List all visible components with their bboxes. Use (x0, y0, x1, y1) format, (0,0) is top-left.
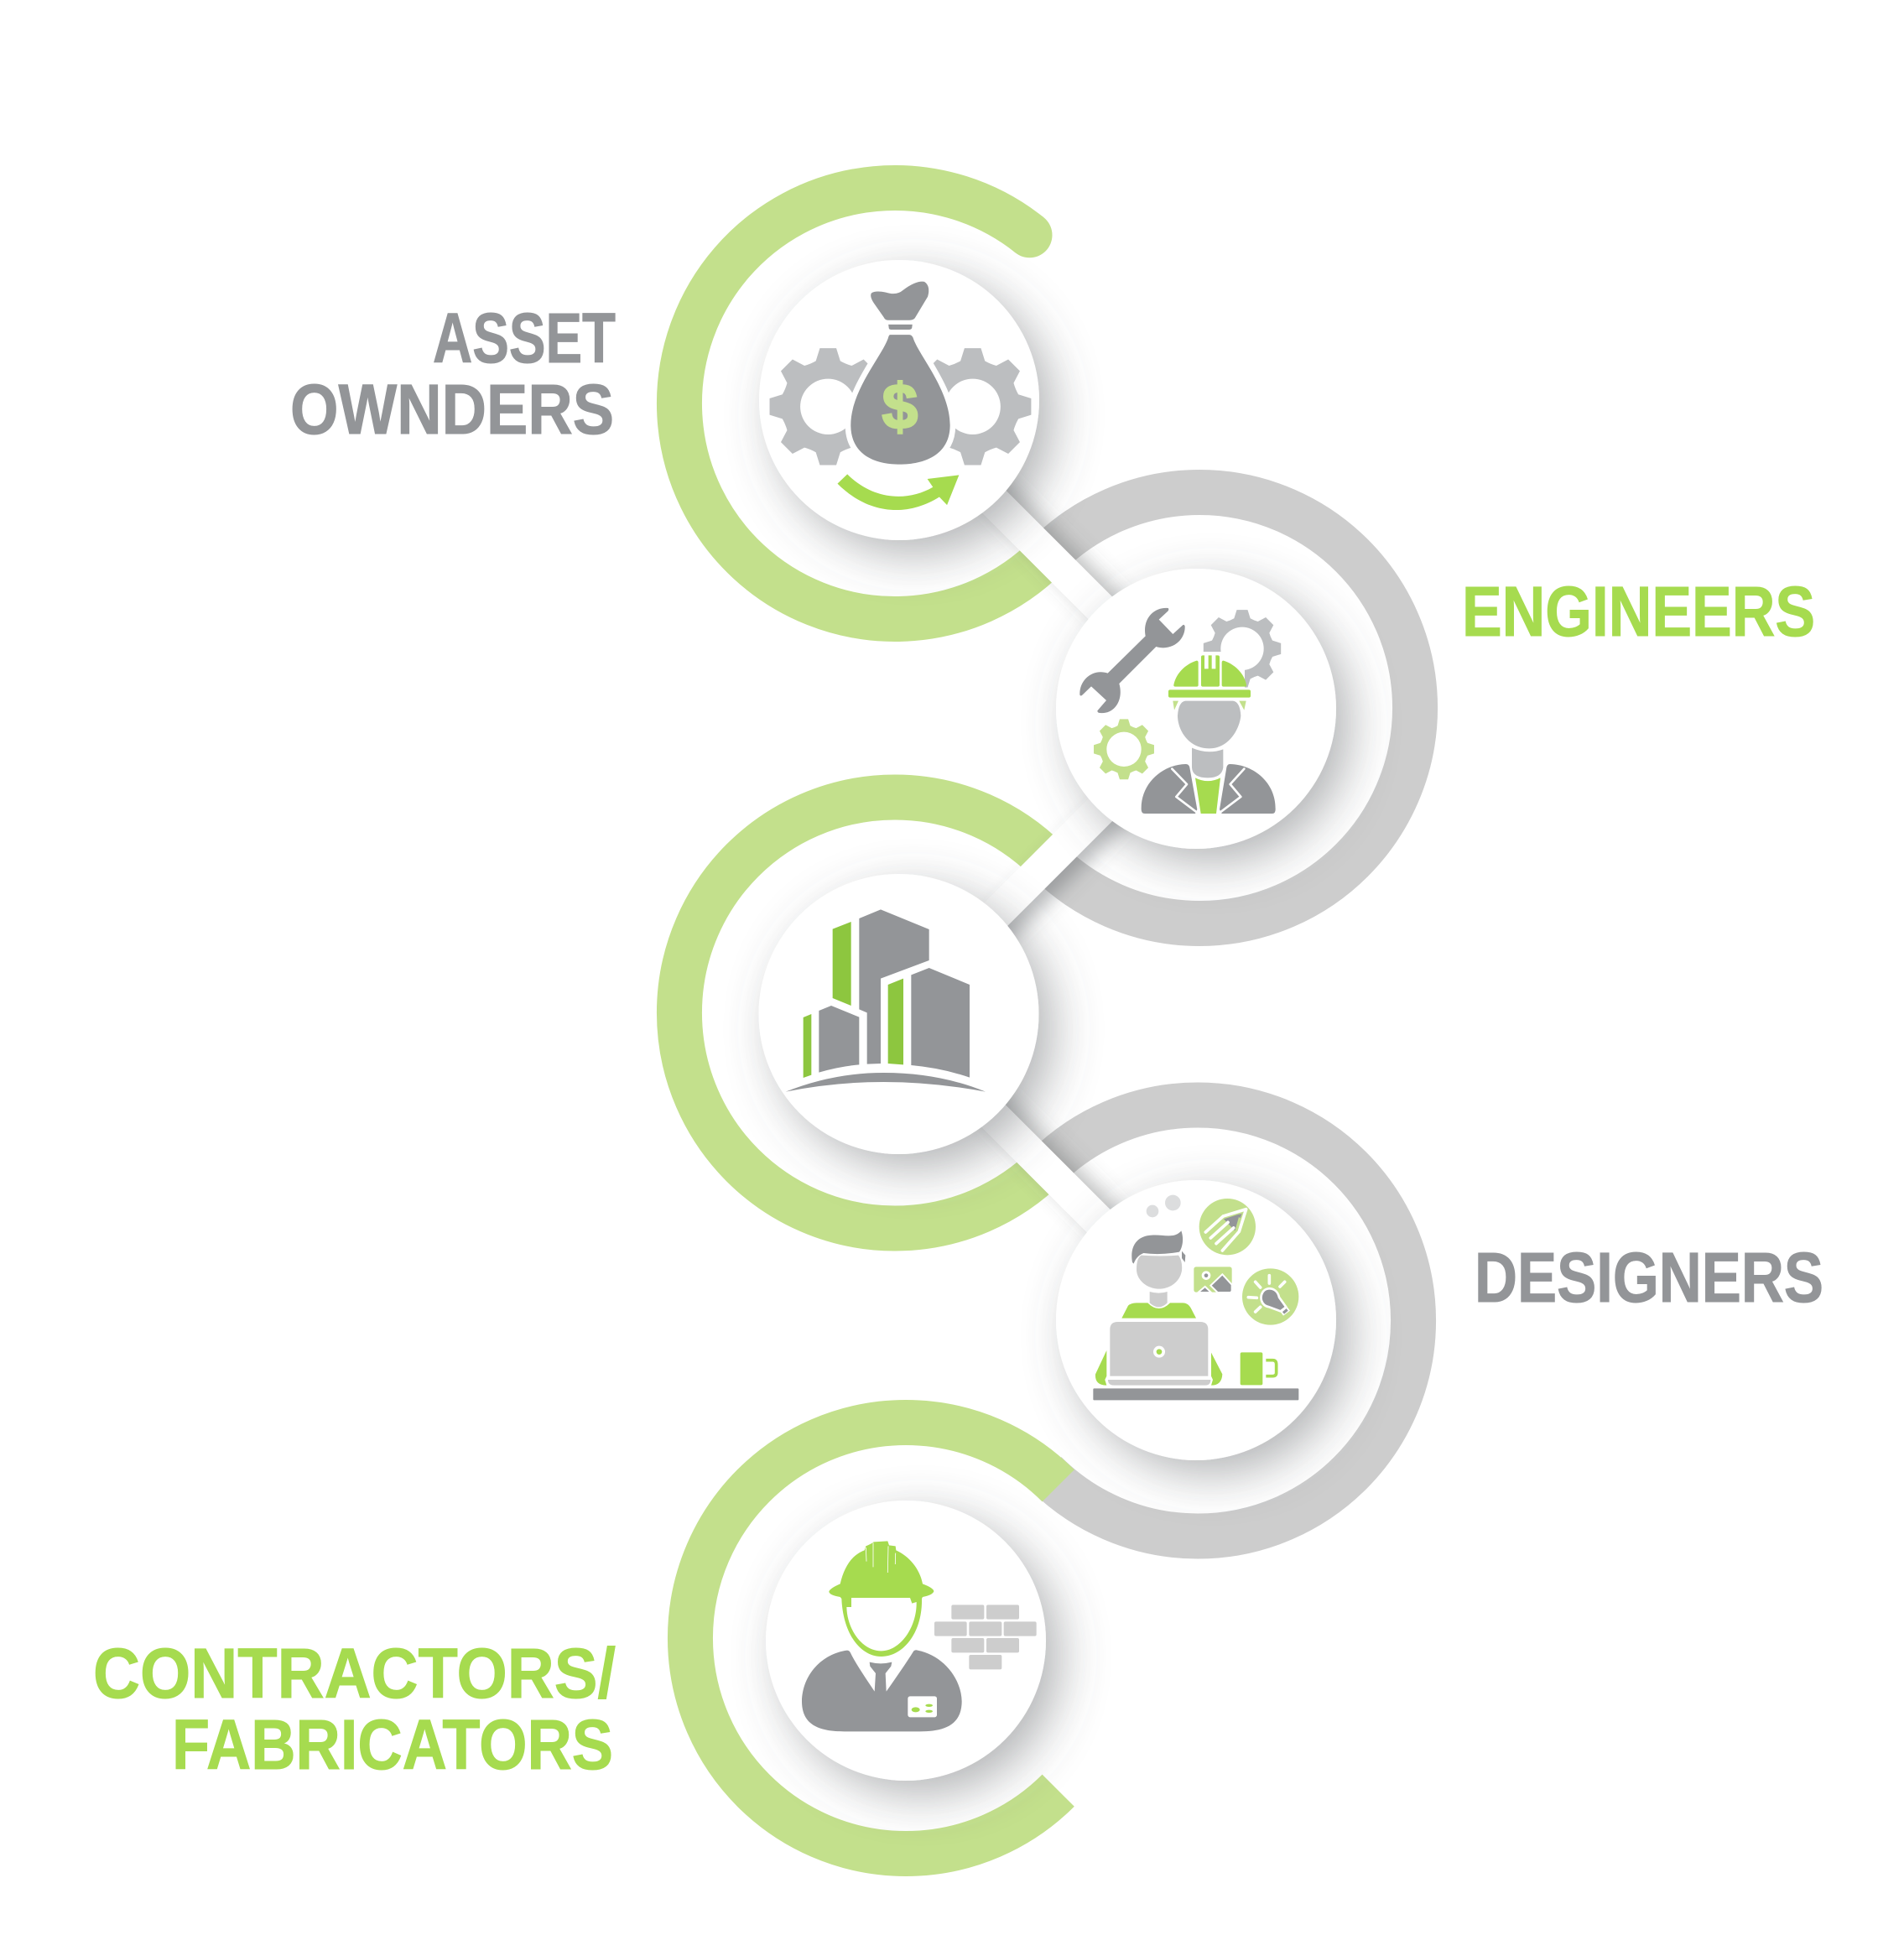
gear cut-out (1191, 652, 1245, 694)
label: contractors / fabricators (93, 1634, 616, 1784)
grey gear (1204, 610, 1281, 688)
icon: money bag with gears (770, 282, 1031, 510)
lapels (1172, 769, 1244, 812)
hard hat and face outline (829, 1541, 934, 1657)
icon: engineer (1079, 608, 1281, 814)
grey facades (819, 909, 970, 1078)
ring: client buildings (green) (679, 797, 1048, 1228)
face (1137, 1256, 1182, 1289)
bulb badge (1242, 1268, 1298, 1325)
label: contractors / fabricators: FABRICATORS (172, 1705, 613, 1784)
icon: designer (1093, 1195, 1298, 1400)
connector band 1 (965, 472, 1124, 632)
label: asset owners (290, 299, 616, 449)
helmet (1168, 655, 1251, 698)
green facades (804, 922, 903, 1078)
desk (1093, 1388, 1298, 1400)
right gear (914, 348, 1031, 465)
circle: asset owners (759, 260, 1039, 540)
bag top (871, 282, 929, 320)
image card (1194, 1267, 1232, 1293)
torso and tie (802, 1650, 962, 1731)
wrench (1079, 608, 1185, 713)
jacket (1142, 764, 1276, 814)
left gear (770, 348, 887, 465)
ground swoosh (786, 1073, 986, 1092)
label: asset owners: OWNDERS (290, 370, 614, 449)
ring: engineers (grey) (1047, 492, 1415, 923)
circle: engineers (1056, 569, 1336, 849)
helmet straps (1173, 701, 1246, 710)
label: contractors / fabricators: CONTRACTORS/ (93, 1634, 616, 1713)
circle: designers (1056, 1180, 1336, 1460)
connector band 2 (965, 787, 1124, 946)
icon: buildings (786, 909, 986, 1092)
circle: buildings (758, 874, 1038, 1154)
face (846, 1598, 917, 1651)
head (1178, 701, 1241, 748)
thought bubbles (1147, 1195, 1181, 1217)
helmet ribs (866, 1542, 896, 1573)
bag tie (888, 325, 913, 330)
pencil badge (1199, 1199, 1256, 1255)
hair (1131, 1230, 1185, 1264)
green gear (1094, 719, 1154, 779)
dollar sign: $ (882, 372, 918, 443)
arms (1095, 1350, 1222, 1386)
circle: contractors (766, 1501, 1046, 1781)
laptop (1108, 1322, 1210, 1386)
neck (1150, 1292, 1168, 1307)
label: engineers: ENGINEERS (1462, 572, 1815, 651)
icon: contractor (802, 1541, 1037, 1731)
ring: contractors (green) (690, 1423, 1059, 1854)
bricks (934, 1605, 1037, 1669)
ring: designers (grey) (1045, 1105, 1413, 1537)
shirt (1121, 1303, 1196, 1319)
bag body (851, 335, 950, 465)
arrow (837, 474, 959, 510)
ring: asset owners (green) (679, 188, 1052, 619)
mug (1241, 1352, 1277, 1385)
badge (908, 1696, 937, 1717)
label: designers: DESIGNERS (1475, 1238, 1823, 1317)
connector band 3 (965, 1087, 1124, 1246)
neck (1192, 748, 1223, 778)
label: asset owners: ASSET (433, 299, 616, 377)
shirt (1195, 778, 1220, 814)
